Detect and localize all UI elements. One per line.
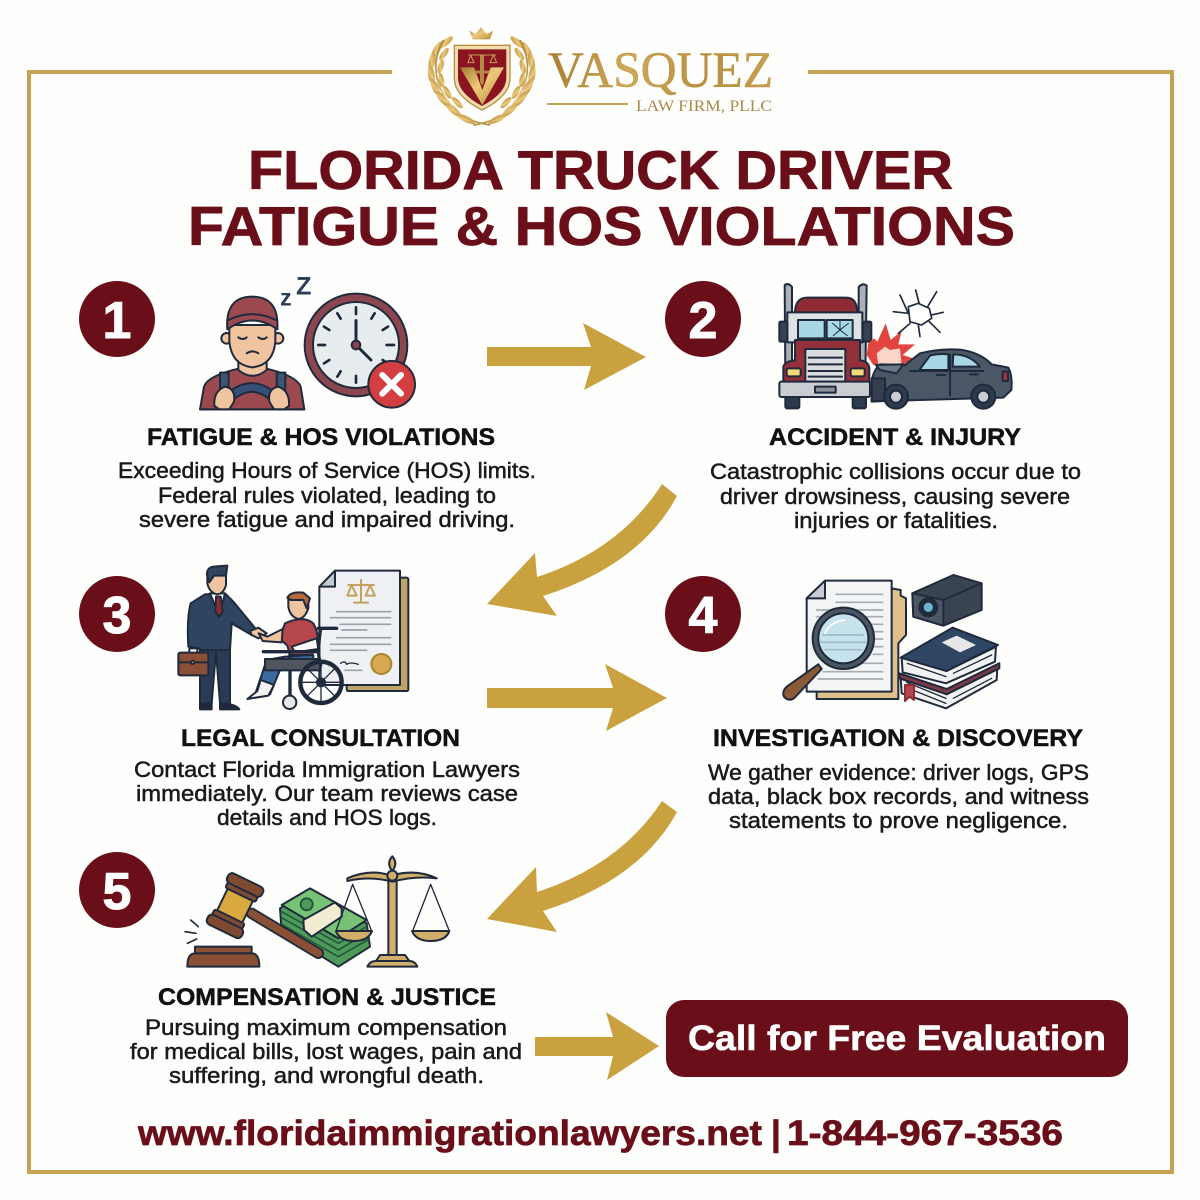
description: fatigue: Federal rules violated, leading to (158, 483, 496, 508)
call to action button: Call for Free Evaluation (688, 1019, 1106, 1058)
icon: crown (469, 27, 493, 39)
description: accident: injuries or fatalities. (794, 508, 998, 533)
icon: truck colliding with car (779, 284, 1012, 409)
description: legal consultation (134, 757, 520, 830)
step 2 number badge: 2 (689, 292, 717, 350)
description: compensation: Pursuing maximum compensation (145, 1015, 507, 1040)
title: FLORIDA TRUCK DRIVER (248, 139, 953, 201)
step 5 number badge (79, 852, 155, 928)
description: fatigue: severe fatigue and impaired driving. (139, 507, 515, 532)
icon: shield (454, 45, 510, 110)
description: investigation: We gather evidence: driver logs, GPS (708, 760, 1089, 785)
arrow: step 4 to 5 (487, 801, 677, 932)
step 1 number badge: 1 (103, 292, 131, 350)
description: investigation (708, 760, 1089, 833)
icon: drowsy driver and clock: z (280, 285, 292, 311)
heading: legal consultation: LEGAL CONSULTATION (181, 725, 460, 752)
footer contact line (137, 1114, 1063, 1153)
logo wordmark: VASQUEZ (548, 43, 773, 99)
step 3 number badge: 3 (103, 587, 131, 645)
step 4 text (708, 725, 1089, 833)
step 4 number badge (665, 576, 741, 652)
step 1 number badge (79, 281, 155, 357)
heading: accident: ACCIDENT & INJURY (769, 424, 1021, 451)
description: compensation: for medical bills, lost wages, pain and (130, 1039, 522, 1064)
description: fatigue: Exceeding Hours of Service (HOS) limits. (118, 458, 536, 483)
footer contact line: | (771, 1114, 781, 1153)
icon: evidence documents, camera and books (783, 575, 999, 708)
heading: investigation: INVESTIGATION & DISCOVERY (713, 725, 1083, 752)
logo: Vasquez Law Firm (426, 27, 773, 126)
icon: lawyer shaking hands with client in wheelchair (178, 566, 408, 709)
footer contact line: 1-844-967-3536 (787, 1114, 1063, 1153)
step 5 text (130, 984, 522, 1088)
description: accident: driver drowsiness, causing severe (720, 484, 1070, 509)
title: FATIGUE & HOS VIOLATIONS (188, 195, 1015, 257)
logo subtitle: LAW FIRM, PLLC (636, 98, 772, 115)
icon: drowsy driver and clock: Z (296, 272, 311, 300)
icon: drowsy driver and clock (200, 272, 415, 409)
step 4 number badge: 4 (689, 587, 718, 645)
description: compensation (130, 1015, 522, 1088)
description: accident (710, 459, 1081, 533)
step 3 number badge (79, 576, 155, 652)
description: accident: Catastrophic collisions occur due to (710, 459, 1081, 484)
step 2 text (710, 424, 1081, 533)
footer contact line: www.floridaimmigrationlawyers.net (137, 1114, 762, 1153)
description: legal consultation: Contact Florida Immigration Lawyers (134, 757, 520, 782)
arrow: step 2 to 3 (487, 484, 677, 616)
heading: compensation: COMPENSATION & JUSTICE (158, 984, 496, 1011)
description: compensation: suffering, and wrongful death. (169, 1063, 484, 1088)
title (188, 139, 1015, 257)
arrow: step 1 to 2 (487, 323, 646, 390)
heading: fatigue: FATIGUE & HOS VIOLATIONS (147, 424, 495, 451)
call to action button (666, 1000, 1128, 1077)
step 5 number badge: 5 (103, 863, 131, 921)
description: legal consultation: immediately. Our team reviews case (136, 781, 518, 806)
step 3 text (134, 725, 520, 830)
icon: gavel, cash and scales (185, 856, 449, 967)
arrow: step 5 to call to action (535, 1012, 659, 1080)
description: investigation: data, black box records, and witness (708, 784, 1089, 809)
step 1 text (118, 424, 536, 532)
description: legal consultation: details and HOS logs. (217, 805, 437, 830)
description: investigation: statements to prove negligence. (729, 808, 1068, 833)
arrow: step 3 to 4 (487, 664, 667, 731)
step 2 number badge (665, 281, 741, 357)
description: fatigue (118, 458, 536, 532)
